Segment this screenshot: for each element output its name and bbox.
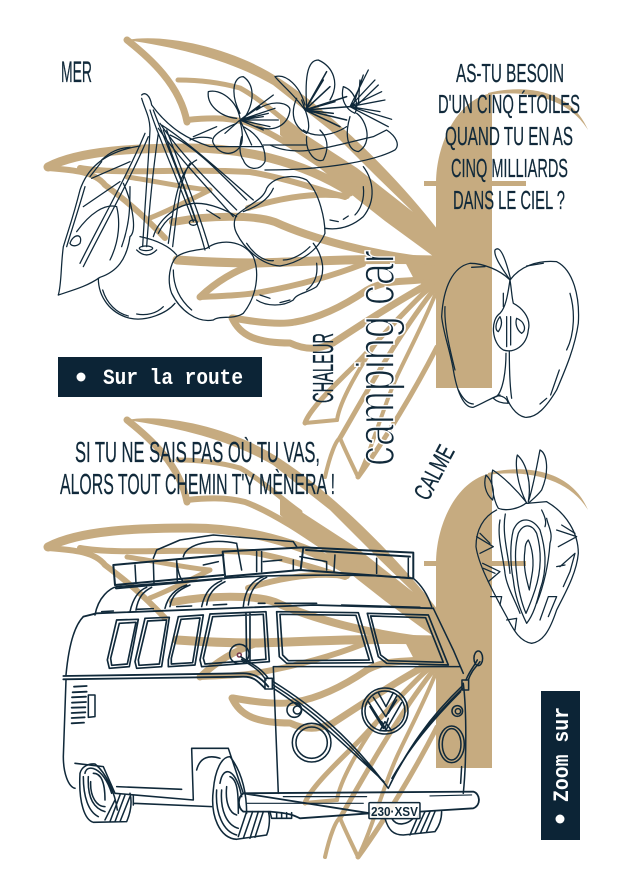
stems [139, 94, 263, 251]
tag: Sur la route: Sur la route [103, 366, 243, 391]
luggage and roof rack [113, 535, 413, 588]
cherry behind [153, 167, 372, 305]
front V trim [273, 680, 469, 788]
tan leaf wing, top [48, 38, 440, 477]
wing mirror, right [466, 651, 483, 680]
quote: chemin [60, 436, 335, 501]
quote: cinq étoiles [438, 58, 580, 215]
illustration: cherries and blossoms [58, 60, 397, 320]
label: CHALEUR: CHALEUR [308, 333, 340, 403]
number plate: 230·XSV [371, 804, 418, 819]
illustration: half apple [442, 249, 579, 417]
tan leaf wing, bottom [48, 418, 440, 857]
infographic page: MER [61, 56, 92, 89]
label: CALME: CALME [409, 440, 461, 505]
wheels [80, 757, 442, 839]
cherry centre [169, 242, 257, 320]
tag: Zoom sur: Zoom sur [550, 707, 575, 802]
tan arch, bottom [424, 469, 588, 768]
bumper [239, 792, 479, 818]
cherry left [98, 237, 177, 319]
tag: Sur la route [58, 357, 262, 397]
leaf [58, 133, 148, 295]
roof and gutter [83, 575, 433, 617]
body [63, 608, 466, 807]
illustration: strawberry [476, 450, 578, 643]
tan arch, top [424, 89, 588, 388]
title: camping car: camping car [346, 250, 406, 466]
quote: chemin: SI TU NE SAIS PAS OÙ TU VAS, [75, 436, 320, 469]
quote: chemin: ALORS TOUT CHEMIN T'Y MÈNERA ! [60, 468, 335, 501]
VW badge [362, 688, 408, 734]
wing mirror, left [230, 644, 272, 689]
headlights and indicators [287, 703, 464, 763]
cherry upper right [234, 177, 325, 266]
windows [107, 612, 448, 668]
tag: Zoom sur [541, 691, 580, 840]
blossoms [190, 60, 397, 170]
illustration: camper van [63, 535, 483, 839]
